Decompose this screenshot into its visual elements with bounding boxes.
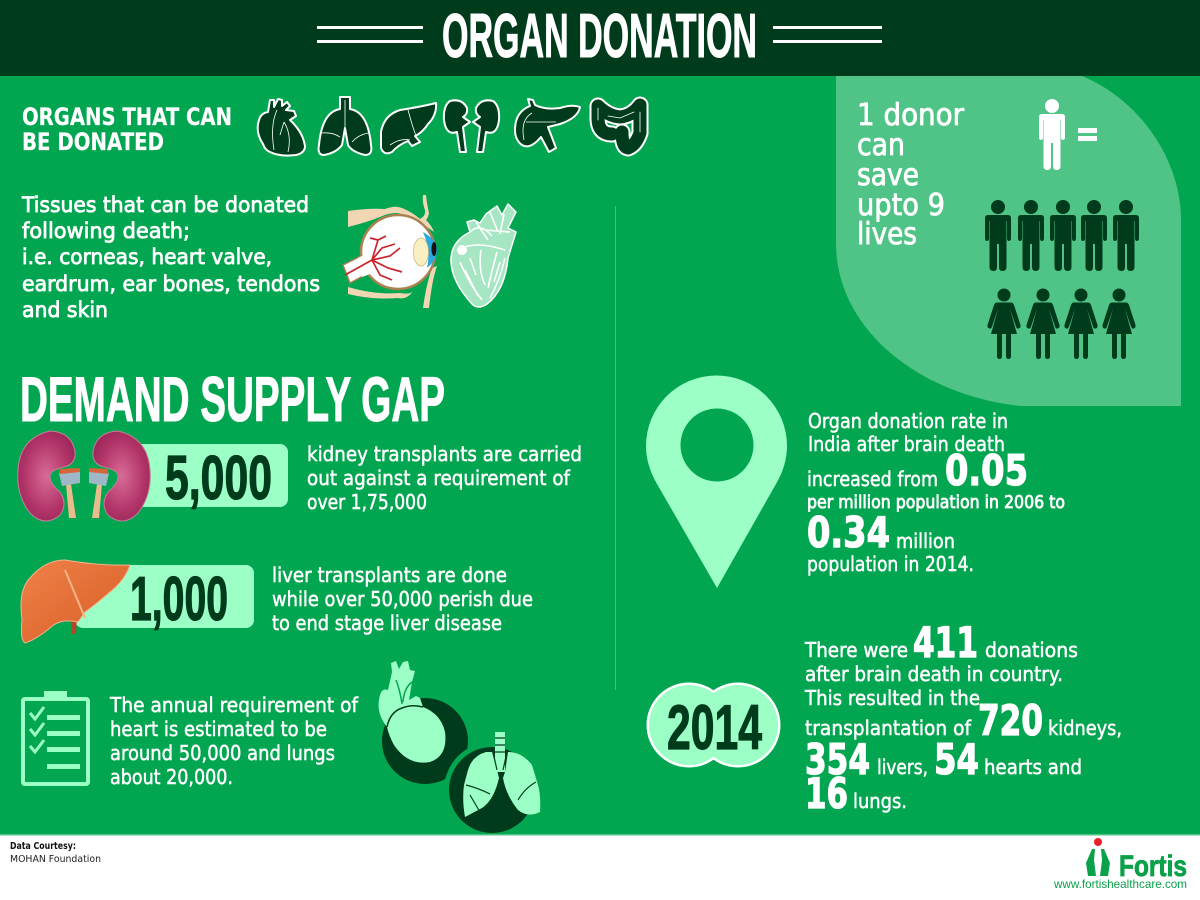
- description: out against a requirement of: [307, 466, 571, 490]
- icon: liver: [381, 103, 436, 153]
- text: 2014 donation figures: 411: [913, 618, 978, 667]
- icon: donor figure: [1039, 99, 1065, 170]
- badge: 2014: [648, 684, 779, 766]
- text: 2014 donation figures: There were: [804, 638, 908, 662]
- logo: Fortis: www.fortishealthcare.com: [1053, 877, 1187, 891]
- text: 2014 donation figures: 354: [805, 735, 870, 784]
- description: over 1,75,000: [307, 490, 427, 514]
- data credit: Data Courtesy:: [10, 841, 76, 852]
- icon: equals sign: [1078, 128, 1097, 141]
- stat: heart and lung requirement: [23, 661, 540, 838]
- data credit: MOHAN Foundation: [10, 854, 101, 865]
- description: [307, 442, 582, 514]
- text: donation rate: Organ donation rate in: [808, 409, 1008, 433]
- illustration: kidneys: [18, 431, 150, 521]
- text: 1 donor can save upto 9 lives: [857, 98, 965, 252]
- icon: colon: [598, 105, 640, 148]
- text: donation rate: 0.05: [945, 446, 1028, 495]
- text: 1 donor can save upto 9 lives: lives: [857, 217, 917, 252]
- text: tissues that can be donated: i.e. corneas, heart valve,: [22, 245, 272, 270]
- text: tissues that can be donated: and skin: [22, 298, 108, 323]
- description: kidney transplants are carried: [307, 442, 582, 466]
- icon: heart in circle: [379, 661, 468, 784]
- text: tissues that can be donated: Tissues that can be donated: [21, 193, 309, 218]
- text: 2014 donation figures: livers,: [877, 755, 928, 779]
- heading: organs that can be donated: BE DONATED: [22, 128, 164, 156]
- heading: organs that can be donated: [22, 103, 232, 156]
- text: 2014 donation figures: [804, 618, 1122, 818]
- text: donation rate: India after brain death: [808, 432, 1005, 456]
- description: The annual requirement of: [109, 693, 359, 717]
- text: 2014 donation figures: This resulted in the: [804, 686, 980, 710]
- icon: checklist: [23, 691, 88, 784]
- data credit: [10, 841, 101, 865]
- icon: eye cross-section: [343, 195, 437, 308]
- icon: heart: [258, 99, 305, 156]
- text: 1 donor can save upto 9 lives: save: [857, 158, 919, 193]
- text: 2014 donation figures: kidneys,: [1048, 716, 1122, 740]
- icon row: donatable organs: [258, 97, 640, 156]
- text: 1 donor can save upto 9 lives: upto 9: [857, 188, 945, 223]
- description: liver transplants are done: [272, 563, 507, 587]
- header band: [0, 0, 1200, 76]
- text: tissues that can be donated: following death;: [22, 219, 190, 244]
- title rules left: [317, 26, 423, 43]
- center divider: [615, 206, 616, 690]
- text: donation rate: [807, 409, 1065, 576]
- title: ORGAN DONATION: [442, 2, 757, 71]
- text: 2014 donation figures: transplantation of: [805, 716, 972, 740]
- text: 2014 donation figures: 54: [934, 735, 979, 784]
- icon: lungs: [319, 97, 371, 155]
- description: heart is estimated to be: [110, 717, 327, 741]
- logo: Fortis: [1053, 838, 1187, 891]
- pill: [130, 444, 288, 507]
- title rules right: [773, 26, 882, 43]
- text: 1 donor can save upto 9 lives: 1 donor: [857, 98, 965, 133]
- icon: lungs in circle: [444, 732, 540, 838]
- illustration: liver: [21, 560, 130, 643]
- text: 2014 donation figures: hearts and: [984, 755, 1082, 779]
- description: around 50,000 and lungs: [110, 741, 335, 765]
- panel: one donor saves nine lives: [836, 76, 1181, 406]
- logo: Fortis: Fortis: [1119, 850, 1187, 883]
- icon: four women: [987, 288, 1136, 359]
- heading: demand supply gap: DEMAND SUPPLY GAP: [20, 365, 445, 435]
- stat: liver transplants: [21, 560, 533, 643]
- text: donation rate: per million population in 2006 to: [807, 492, 1065, 513]
- badge: 2014: 2014: [667, 693, 762, 763]
- text: 2014 donation figures: 16: [805, 769, 848, 818]
- text: tissues that can be donated: eardrum, ear bones, tendons: [22, 272, 320, 297]
- number: 1,000: [130, 565, 228, 634]
- description: [272, 563, 533, 635]
- text: 2014 donation figures: after brain death in country.: [805, 662, 1063, 686]
- text: donation rate: million: [896, 529, 955, 553]
- text: 2014 donation figures: donations: [985, 638, 1078, 662]
- icon: five men: [985, 200, 1139, 271]
- stat: kidney transplants: [18, 431, 582, 521]
- text: donation rate: population in 2014.: [807, 552, 974, 576]
- icon: pancreas: [515, 99, 580, 152]
- description: while over 50,000 perish due: [272, 587, 533, 611]
- description: to end stage liver disease: [272, 611, 502, 635]
- description: [109, 693, 359, 789]
- icon: sketched heart: [451, 204, 516, 307]
- number: 5,000: [165, 444, 272, 513]
- description: about 20,000.: [110, 765, 233, 789]
- footer: [0, 834, 1200, 900]
- text: 1 donor can save upto 9 lives: can: [857, 128, 905, 163]
- icon: map pin: [646, 376, 787, 588]
- pill: [75, 565, 254, 628]
- text: tissues that can be donated: [21, 193, 320, 323]
- text: donation rate: increased from: [807, 467, 938, 491]
- text: 2014 donation figures: 720: [978, 696, 1043, 745]
- heading: organs that can be donated: ORGANS THAT CAN: [22, 103, 232, 131]
- text: 2014 donation figures: lungs.: [853, 789, 907, 813]
- icon: kidneys: [444, 100, 499, 152]
- text: donation rate: 0.34: [807, 508, 890, 557]
